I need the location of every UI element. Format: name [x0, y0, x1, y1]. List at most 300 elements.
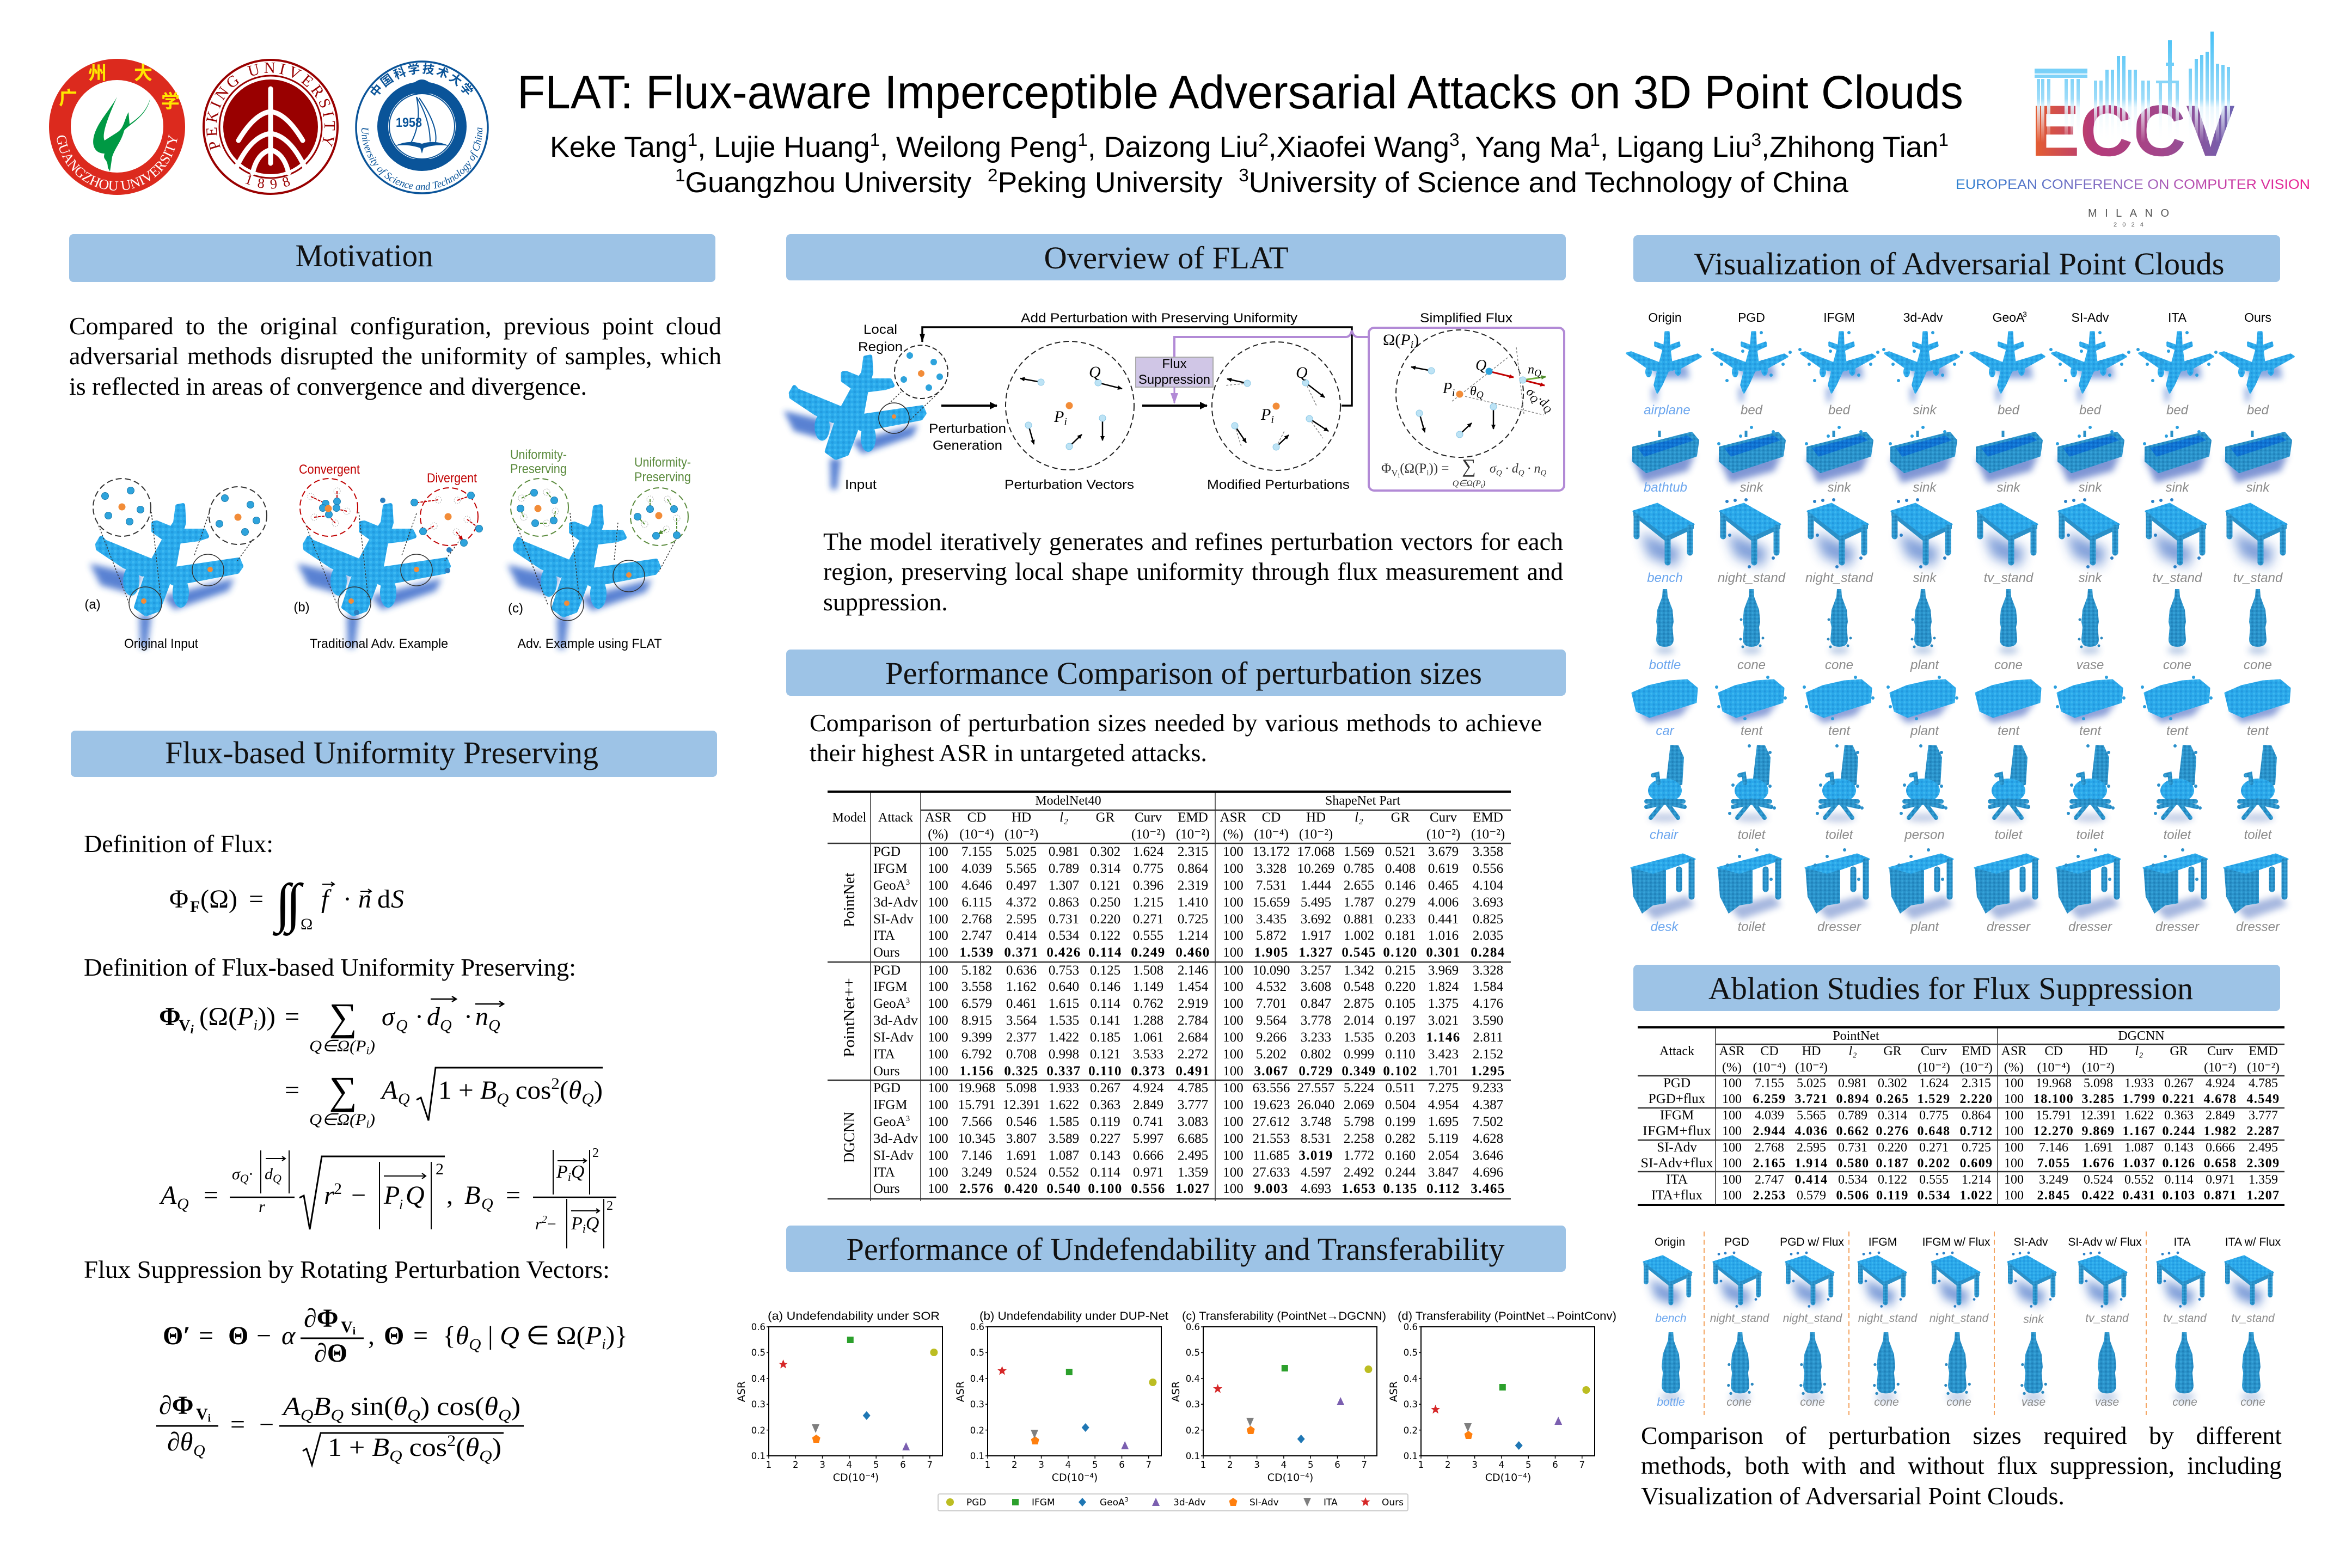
equation: flux	[169, 873, 404, 936]
chart (d): 4	[1499, 1460, 1504, 1470]
table values: 0.100	[1088, 1181, 1123, 1196]
equation: flux: ·	[343, 885, 352, 914]
row: bench	[1633, 498, 2287, 585]
attack names: GeoA	[873, 878, 906, 893]
row: bottle	[1657, 1332, 2265, 1408]
table values: 100	[2004, 1156, 2024, 1171]
table: ablation: (10⁻²)	[2082, 1061, 2115, 1075]
chart (c): ASR	[1170, 1381, 1182, 1402]
equation: flux derivative	[156, 1391, 524, 1465]
table values: 7.502	[1473, 1114, 1503, 1129]
table values: 1.772	[1344, 1148, 1374, 1163]
table values: 0.146	[1385, 878, 1416, 893]
row: bottle: cone	[2172, 1396, 2197, 1408]
table values: 3.847	[1428, 1165, 1459, 1180]
table values: 4.628	[1473, 1131, 1503, 1146]
row: airplane: bed	[1828, 403, 1851, 418]
table values: 1.824	[1428, 979, 1459, 994]
table values: 0.999	[1344, 1047, 1374, 1062]
table values: 100	[2004, 1076, 2024, 1091]
equation: flux: f	[321, 885, 332, 914]
table values: 1.584	[1473, 979, 1504, 994]
chart legend: 3d-Adv	[1173, 1497, 1206, 1508]
row: desk: dresser	[2236, 920, 2280, 934]
equation: A_Q and B_Q: Q	[571, 1162, 584, 1182]
figure labels: Uniformity-	[510, 448, 567, 462]
attack names: SI-Adv	[873, 912, 914, 927]
row: bench: tv_stand	[2153, 571, 2202, 585]
logo: ECCV: ECCV	[2031, 91, 2235, 171]
table values: 0.552	[2124, 1173, 2154, 1187]
attack names: Ours	[873, 1181, 900, 1196]
equation: A_Q and B_Q: P	[571, 1214, 583, 1234]
table values: 0.864	[1178, 861, 1209, 876]
figure: ablation point clouds	[1644, 1232, 2281, 1415]
table values: 0.371	[1004, 945, 1039, 960]
simplified flux panel: Q	[1528, 393, 1540, 405]
model group labels: PointNet	[841, 873, 858, 927]
table values: 100	[1223, 1013, 1244, 1028]
table values: 0.114	[1088, 945, 1122, 960]
table values: 2.944	[1753, 1124, 1786, 1138]
attack names: ITA	[873, 1047, 895, 1062]
equation: flux-based uniformity: )	[368, 1037, 375, 1055]
logo: Guangzhou University	[49, 58, 185, 195]
table values: 100	[1223, 1131, 1244, 1146]
chart (b): ASR	[954, 1381, 966, 1402]
chart (a): (a) Undefendability under SOR	[768, 1310, 940, 1322]
table values: 0.998	[1049, 1047, 1079, 1062]
table values: 12.391	[1003, 1098, 1040, 1112]
table values: 1.529	[1918, 1092, 1950, 1106]
table values: 0.114	[1090, 1165, 1120, 1180]
figure labels: Divergent	[427, 471, 477, 486]
logo: Guangzhou University: 大	[134, 58, 152, 85]
table values: 0.267	[1090, 1081, 1120, 1095]
equation: theta update: |	[481, 1321, 500, 1350]
table values: 0.250	[1090, 895, 1120, 910]
text: motivation paragraph: adversarial methods disrupted the uniformity of samples, which	[69, 342, 721, 370]
chart (b): 0.6	[970, 1322, 984, 1332]
row: bathtub: sink	[1997, 480, 2021, 495]
table: ablation: (10⁻²)	[1960, 1061, 1993, 1075]
simplified flux panel: )	[1482, 479, 1485, 488]
table values: 4.693	[1301, 1181, 1331, 1196]
table values: 100	[928, 1013, 948, 1028]
equation: A_Q and B_Q: r	[259, 1198, 265, 1216]
arrow: flux suppression link	[1174, 330, 1369, 357]
attack names: Ours	[873, 945, 900, 960]
figure labels: (b)	[293, 600, 310, 615]
table values: 2.492	[1344, 1165, 1374, 1180]
table values: 0.881	[1344, 912, 1374, 927]
table values: 8.915	[961, 1013, 992, 1028]
table values: 0.244	[1385, 1165, 1416, 1180]
table values: 4.039	[961, 861, 992, 876]
equation: flux derivative: A	[281, 1392, 301, 1421]
figure labels: Preserving	[634, 470, 691, 485]
table values: 2.747	[961, 928, 992, 943]
table: perturbation sizes: HD	[1306, 810, 1326, 825]
arrow: feedback loop	[922, 327, 1352, 406]
table values: 1.569	[1344, 844, 1374, 859]
table values: 100	[1722, 1092, 1742, 1106]
column headers: 3d-Adv	[1903, 310, 1943, 324]
table values: 5.202	[1256, 1047, 1287, 1062]
table values: 0.282	[1385, 1131, 1416, 1146]
simplified flux panel: Ω(P	[1383, 331, 1411, 349]
row: bench: tv_stand	[2231, 1312, 2275, 1325]
table values: 100	[928, 895, 948, 910]
table values: 19.623	[1253, 1098, 1290, 1112]
table values: 2.309	[2246, 1156, 2280, 1171]
simplified flux panel: · n	[1524, 462, 1541, 476]
table values: 3.721	[1794, 1092, 1828, 1106]
equation: flux-based uniformity: ∑	[329, 1069, 357, 1112]
table values: 0.114	[2164, 1173, 2194, 1187]
chart legend: PGD	[966, 1497, 987, 1508]
table values: 2.220	[1960, 1092, 1993, 1106]
attack names: IFGM+flux	[1643, 1124, 1712, 1138]
row: bench: night_stand	[1710, 1312, 1770, 1325]
simplified flux panel: σ	[1490, 462, 1496, 476]
table values: 3.285	[2082, 1092, 2115, 1106]
table values: 0.579	[1797, 1189, 1826, 1203]
table: perturbation sizes: (10⁻²)	[1176, 827, 1210, 842]
panel: Ablation Studies for Flux Suppression	[1633, 965, 2284, 1513]
row: bathtub: bathtub	[1644, 480, 1687, 495]
figure labels: Uniformity-	[634, 455, 691, 470]
equation: flux derivative: sin(	[344, 1392, 394, 1421]
figure: ablation point clouds: ITA w/ Flux	[2225, 1236, 2281, 1248]
chart (b): 2	[1012, 1460, 1018, 1470]
text: ablation paragraph: methods, both with and without flux suppression, including	[1641, 1451, 2282, 1479]
row: bench: bench	[1655, 1312, 1687, 1325]
attack names: GeoA	[873, 996, 906, 1011]
row: desk: dresser	[2068, 920, 2112, 934]
table: ablation	[1638, 1027, 2284, 1205]
attack names: 3	[906, 878, 910, 887]
table values: 0.122	[1878, 1173, 1907, 1187]
table values: 0.524	[1006, 1165, 1037, 1180]
table values: 2.315	[1178, 844, 1208, 859]
table values: 0.215	[1385, 963, 1416, 978]
table values: 0.662	[1836, 1124, 1870, 1138]
table: ablation: PointNet	[1833, 1029, 1879, 1043]
attack names: SI-Adv	[1657, 1140, 1697, 1155]
table values: 4.924	[1133, 1081, 1164, 1095]
table values: 100	[1223, 1064, 1244, 1079]
chart (d): 0.1	[1404, 1451, 1418, 1461]
table values: 0.121	[1090, 1047, 1120, 1062]
table values: 1.444	[1301, 878, 1332, 893]
table values: 1.146	[1426, 1030, 1461, 1045]
equation: flux-based uniformity: i	[366, 1118, 369, 1130]
chart (b): 7	[1146, 1460, 1152, 1470]
table values: 3.646	[1473, 1148, 1503, 1163]
table values: 4.785	[2249, 1076, 2278, 1091]
table values: 100	[1223, 979, 1244, 994]
row: desk: plant	[1910, 920, 1939, 934]
attack names: PGD+flux	[1649, 1092, 1706, 1106]
table values: 11.685	[1253, 1148, 1290, 1163]
table: perturbation sizes: (10⁻²)	[1131, 827, 1165, 842]
table values: 0.426	[1046, 945, 1081, 960]
table values: 0.105	[1385, 996, 1416, 1011]
table values: 1.016	[1428, 928, 1459, 943]
table values: 2.165	[1753, 1156, 1786, 1171]
table values: 3.564	[1006, 1013, 1037, 1028]
heading: Performance Comparison: Performance Comparison of perturbation sizes	[885, 656, 1482, 691]
equation: theta update: =	[413, 1321, 428, 1350]
heading: Motivation: Motivation	[295, 238, 433, 273]
attack names: 3d-Adv	[873, 1131, 918, 1146]
table values: 0.114	[1090, 996, 1120, 1011]
table values: 0.504	[1385, 1098, 1416, 1112]
equation: A_Q and B_Q: Q	[177, 1195, 189, 1213]
chart (c): 0.1	[1186, 1451, 1200, 1461]
chart (d): 0.6	[1404, 1322, 1418, 1332]
table values: 2.919	[1178, 996, 1208, 1011]
equation: theta update: ∂Θ	[314, 1339, 347, 1368]
equation: A_Q and B_Q: 2	[436, 1160, 444, 1178]
modified perturbations circle: Q	[1296, 364, 1308, 382]
row: bathtub: sink	[1828, 480, 1852, 495]
table values: 26.040	[1297, 1098, 1334, 1112]
table values: 2.747	[1755, 1173, 1784, 1187]
table values: 6.792	[961, 1047, 992, 1062]
equation: flux derivative: θ	[394, 1392, 407, 1421]
arrow: perturbation generation	[941, 405, 997, 407]
simplified flux panel: Q∈Ω(P	[1453, 479, 1481, 488]
simplified flux panel: )) =	[1429, 461, 1449, 476]
table values: 0.640	[1049, 979, 1079, 994]
chart (b): 0.2	[970, 1425, 984, 1436]
equation: flux-based uniformity: i	[254, 1017, 258, 1033]
table values: 0.825	[1473, 912, 1503, 927]
table values: 0.753	[1049, 963, 1079, 978]
figure labels: Traditional Adv. Example	[310, 636, 448, 651]
model group labels: PointNet++	[841, 978, 858, 1057]
figure labels	[84, 448, 691, 651]
authors: , Lujie Huang	[697, 131, 870, 163]
table values: 13.172	[1253, 844, 1290, 859]
figure: ablation point clouds: SI-Adv	[2013, 1236, 2048, 1248]
table: ablation: l₂	[1848, 1044, 1857, 1058]
equation: flux-based uniformity: A	[380, 1076, 398, 1105]
equation: A_Q and B_Q: Q	[586, 1214, 599, 1234]
equation: theta update: Θ	[228, 1321, 248, 1350]
table values: 0.199	[1385, 1114, 1416, 1129]
equation: A_Q and B_Q: 2	[334, 1180, 342, 1198]
chart (a): 1	[766, 1460, 771, 1470]
table: perturbation sizes: CD	[967, 810, 986, 825]
equation: A_Q and B_Q: 2	[607, 1199, 613, 1213]
table values: 2.014	[1344, 1013, 1375, 1028]
table: perturbation sizes: (10⁻²)	[1004, 827, 1038, 842]
table values: 19.968	[2036, 1076, 2072, 1091]
table values: 7.146	[2039, 1141, 2068, 1155]
equation: flux derivative: θ	[465, 1433, 479, 1462]
table values: 6.579	[961, 996, 992, 1011]
table: perturbation sizes	[828, 792, 1511, 1201]
attack names: ITA	[873, 928, 895, 943]
chart (a): 0.5	[751, 1347, 765, 1358]
table values: 4.372	[1006, 895, 1037, 910]
attack names	[1641, 1076, 1713, 1203]
table values: 1.061	[1133, 1030, 1163, 1045]
simplified flux panel: i	[1398, 471, 1400, 479]
table values: 100	[1223, 861, 1244, 876]
affiliations: Peking University	[998, 167, 1239, 199]
table values: 0.506	[1836, 1189, 1870, 1203]
table values: 1.914	[1794, 1156, 1828, 1171]
table: perturbation sizes: l₂	[1059, 810, 1068, 825]
chart (a): 0.6	[751, 1322, 765, 1332]
text: ablation paragraph	[1641, 1420, 2282, 1513]
row: desk	[1631, 848, 2288, 934]
table values: 0.276	[1876, 1124, 1909, 1138]
table values: 0.396	[1133, 878, 1163, 893]
table: ablation: Curv	[1921, 1044, 1947, 1058]
chart (a): 0.3	[751, 1399, 765, 1410]
table values: 6.115	[961, 895, 992, 910]
table values: 1.214	[1178, 928, 1209, 943]
figure: ablation point clouds: Origin	[1655, 1236, 1685, 1248]
equation: flux-based uniformity: n	[475, 1002, 488, 1031]
table values: 0.203	[1385, 1030, 1416, 1045]
equation: A_Q and B_Q: i	[399, 1197, 403, 1212]
text: motivation paragraph: is reflected in areas of convergence and divergence.	[69, 372, 587, 400]
equation: A_Q and B_Q: Q	[240, 1172, 249, 1185]
equation: theta update: −	[256, 1321, 271, 1350]
table values: 0.521	[1385, 844, 1416, 859]
table values: 100	[1223, 996, 1244, 1011]
table values: 1.454	[1178, 979, 1209, 994]
chart (c): 7	[1362, 1460, 1367, 1470]
table values: 5.025	[1797, 1076, 1826, 1091]
table values: 1.535	[1049, 1013, 1079, 1028]
table values: 1.622	[1049, 1098, 1079, 1112]
table values: 0.143	[1090, 1148, 1120, 1163]
equation: flux-based uniformity: Q	[440, 1016, 452, 1034]
equation: flux: =	[249, 885, 264, 914]
table values: 1.422	[1049, 1030, 1079, 1045]
table values: 100	[928, 979, 948, 994]
table values: 100	[1223, 1081, 1244, 1095]
table values: 3.257	[1301, 963, 1331, 978]
equation: theta update: =	[199, 1321, 213, 1350]
text: ablation paragraph: Visualization of Adversarial Point Clouds.	[1641, 1482, 2065, 1510]
row: airplane: airplane	[1644, 403, 1690, 418]
table: ablation: ASR	[1719, 1044, 1744, 1058]
table: perturbation sizes: EMD	[1178, 810, 1208, 825]
table values: 100	[1722, 1108, 1742, 1123]
table values: 100	[1223, 928, 1244, 943]
table values: 100	[1223, 1030, 1244, 1045]
table values: 0.420	[1004, 1181, 1039, 1196]
row: car	[1632, 676, 2290, 738]
heading: Ablation Studies	[1633, 965, 2280, 1011]
table values: 0.491	[1175, 1064, 1210, 1079]
table values: 100	[2004, 1141, 2024, 1155]
figure: ablation point clouds: ITA	[2173, 1236, 2191, 1248]
table values: 3.558	[961, 979, 992, 994]
column headers: Ours	[2244, 310, 2271, 324]
table values: 1.695	[1428, 1114, 1459, 1129]
table values: 15.659	[1253, 895, 1290, 910]
simplified flux panel: Q	[1518, 469, 1524, 477]
chart (a)	[736, 1310, 942, 1484]
row: bathtub: sink	[2079, 480, 2103, 495]
table values: 100	[928, 1114, 948, 1129]
table values: 9.003	[1254, 1181, 1289, 1196]
authors: Keke Tang	[550, 131, 686, 163]
table values: 0.373	[1131, 1064, 1166, 1079]
table values: 0.302	[1090, 844, 1120, 859]
table: ablation: l₂	[2135, 1044, 2143, 1058]
model group labels	[841, 873, 858, 1163]
table values: 100	[2004, 1189, 2024, 1203]
table values: 1.342	[1344, 963, 1374, 978]
simplified flux panel: Φ	[1381, 461, 1391, 476]
text: comparison intro	[810, 708, 1542, 770]
equation: flux derivative: 1 + B	[328, 1433, 388, 1462]
attack names: PGD	[1663, 1076, 1690, 1091]
row: chair: toilet	[2164, 828, 2192, 842]
figure labels: Convergent	[299, 462, 360, 477]
equation: flux: Φ	[169, 885, 188, 914]
logo: Peking University	[203, 59, 339, 195]
chart (b): 4	[1065, 1460, 1071, 1470]
row: chair: toilet	[1738, 828, 1766, 842]
heading: Ablation Studies: Ablation Studies for Flux Suppression	[1708, 971, 2193, 1006]
text: ablation paragraph: Comparison of perturbation sizes required by different	[1641, 1422, 2282, 1449]
equation: flux derivative: −	[259, 1410, 274, 1439]
row: airplane: bed	[2247, 403, 2269, 418]
row: car: plant	[1910, 724, 1939, 738]
logo: University of Science and Technology of China: University of Science and Technology of China	[362, 127, 482, 190]
table values: 3.777	[1178, 1098, 1208, 1112]
table values: 0.441	[1428, 912, 1459, 927]
logo: University of Science and Technology of China: 中国科学技术大学	[370, 63, 474, 96]
simplified flux panel: n	[1528, 363, 1534, 377]
table values: 2.495	[2249, 1141, 2278, 1155]
table values: 1.653	[1342, 1181, 1376, 1196]
plane (b) traditional adversarial example	[297, 479, 482, 648]
authors: 2	[1258, 130, 1269, 150]
table values: 0.666	[2206, 1141, 2235, 1155]
text: motivation paragraph: Compared to the original configuration, previous point cloud	[69, 312, 721, 340]
table values: 5.798	[1344, 1114, 1374, 1129]
table values: 9.233	[1473, 1081, 1503, 1095]
equation: flux derivative: =	[230, 1410, 245, 1439]
table values: 0.314	[1878, 1108, 1907, 1123]
simplified flux panel: )	[1413, 331, 1419, 349]
table values: 0.119	[1876, 1189, 1909, 1203]
table values: 100	[2004, 1173, 2024, 1187]
modified perturbations circle: P	[1261, 406, 1271, 424]
equation: flux derivative: )	[492, 1433, 501, 1462]
table values: 0.864	[1962, 1108, 1991, 1123]
table values: 5.872	[1256, 928, 1287, 943]
table values: 1.359	[2249, 1173, 2278, 1187]
table values: 4.696	[1473, 1165, 1503, 1180]
table values: 0.431	[2122, 1189, 2156, 1203]
figure: ablation point clouds: IFGM	[1869, 1236, 1897, 1248]
table values: 100	[1223, 945, 1244, 960]
equation: flux-based uniformity: ∑	[329, 995, 357, 1039]
